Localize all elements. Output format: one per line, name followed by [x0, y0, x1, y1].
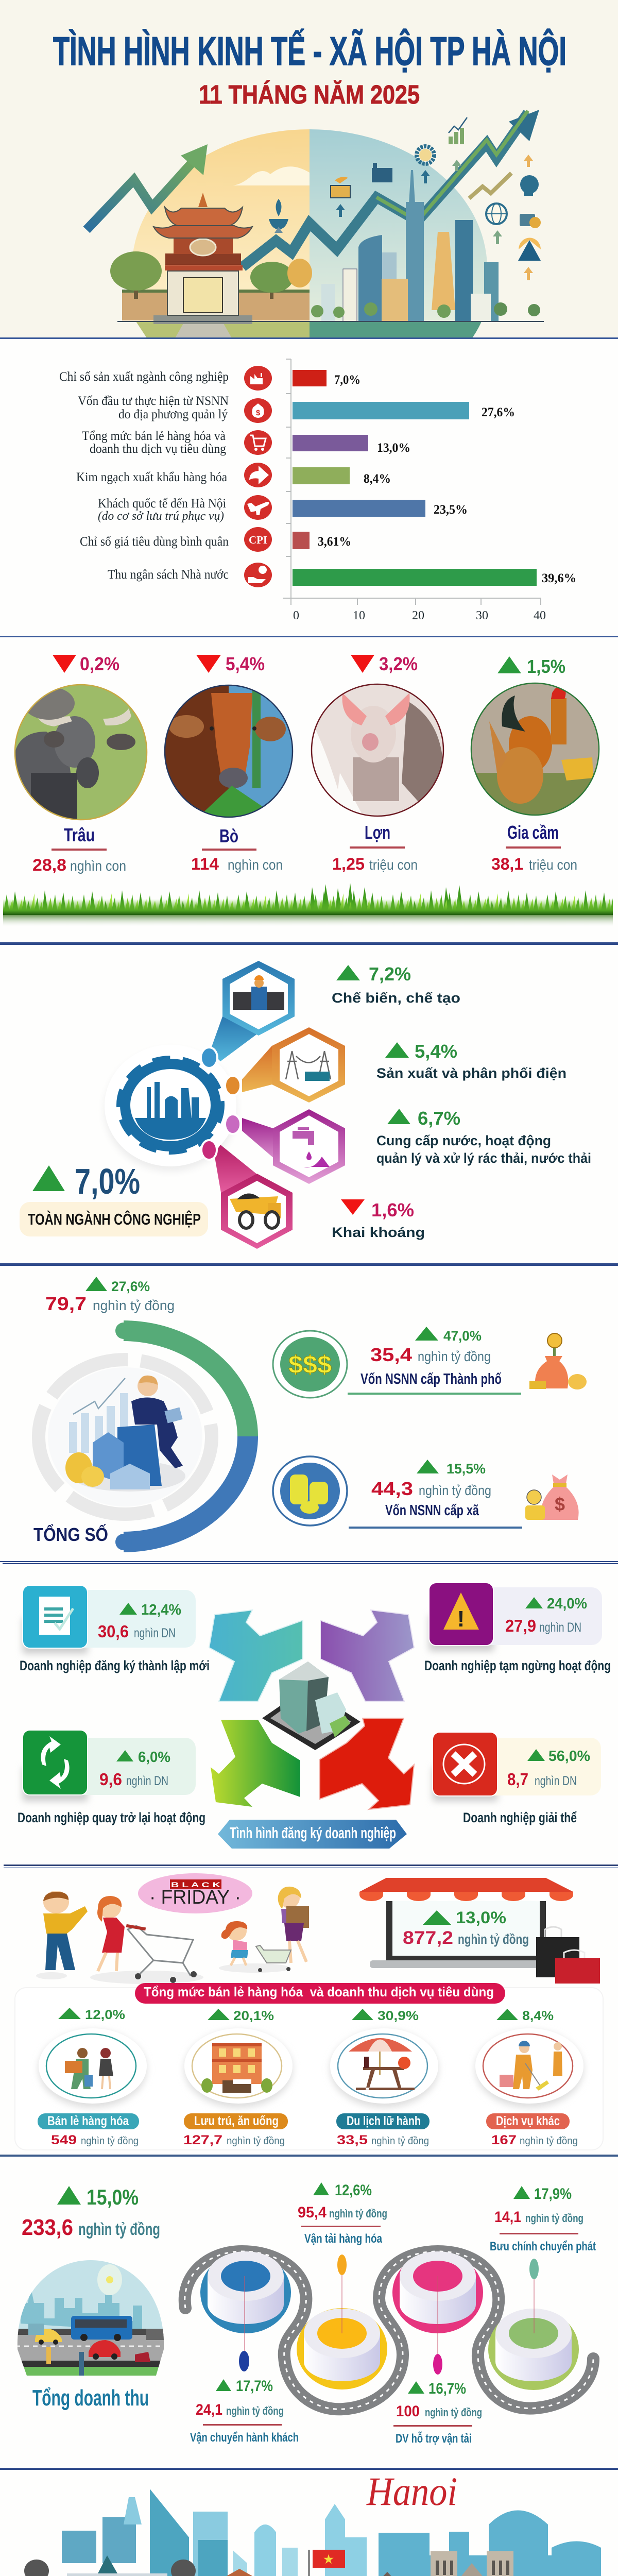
- column: goods retail: [38, 2008, 147, 2147]
- building: Ho Chi Minh Mausoleum and flag: ★: [323, 2553, 334, 2566]
- stat: total retail: 877,2: [403, 1928, 453, 1948]
- stat: poultry change: [497, 656, 565, 677]
- stat: manufacturing: [332, 963, 460, 1006]
- stat: water and waste: Cung cấp nước, hoạt động: [376, 1133, 551, 1148]
- card: new enterprises: 12,4%: [141, 1602, 181, 1618]
- stat: total retail: 13,0%: [456, 1908, 506, 1927]
- column: goods retail: 549: [51, 2133, 77, 2147]
- illustration: online store laptop: [359, 1878, 600, 1984]
- badge: Black Friday: · FRIDAY ·: [149, 1887, 241, 1908]
- row: international visitors: Khách quốc tế đến Hà Nội: [98, 497, 226, 511]
- label: Bò: 114: [191, 855, 219, 873]
- label: Bò: nghìn con: [228, 857, 283, 873]
- row: CPI: CPI: [249, 534, 267, 546]
- row: public investment: [78, 394, 515, 423]
- label: enterprise registration status: [218, 1820, 407, 1849]
- card: suspended enterprises: nghìn DN: [539, 1620, 581, 1635]
- panel: retail breakdown: [15, 1988, 603, 2150]
- stat: postal delivery: nghìn tỷ đồng: [525, 2212, 583, 2225]
- photo: buffalo: [15, 685, 147, 820]
- photo border: buffalo: [15, 685, 147, 820]
- label: Lợn: 1,25: [332, 855, 365, 873]
- building: St Joseph Cathedral: [431, 2551, 513, 2576]
- column: travel: 30,9%: [377, 2009, 419, 2023]
- illustration: shoppers: [36, 1887, 309, 1984]
- icon: pink money bag: $: [555, 1494, 565, 1515]
- illustration: street scene: [15, 2260, 166, 2377]
- stat: support services: [393, 2380, 482, 2446]
- photo: chicken: [471, 683, 599, 815]
- label: total revenue: Tổng doanh thu: [32, 2385, 149, 2411]
- card: resumed enterprises: 6,0%: [138, 1749, 170, 1766]
- photo border: chicken: [471, 683, 599, 815]
- icon: pink money bag: [525, 1475, 579, 1520]
- label: Trâu: [32, 824, 126, 874]
- panel: livestock: [3, 653, 613, 927]
- stat: city capital: Vốn NSNN cấp Thành phố: [360, 1371, 502, 1387]
- column: travel: Du lịch lữ hành: [347, 2114, 421, 2128]
- stat: electricity: Sản xuất và phân phối điện: [376, 1065, 566, 1081]
- row: state budget: [108, 563, 576, 587]
- header panel: [0, 0, 618, 338]
- stat: total capital: nghìn tỷ đồng: [93, 1298, 175, 1313]
- stat: manufacturing: 7,2%: [369, 963, 411, 985]
- stat: total transport revenue: nghìn tỷ đồng: [78, 2219, 160, 2239]
- column: goods retail: Bán lẻ hàng hóa: [47, 2114, 129, 2128]
- stat: total capital: 79,7: [45, 1293, 87, 1314]
- row: public investment: $: [256, 409, 261, 417]
- card: dissolved enterprises: 56,0%: [548, 1748, 590, 1765]
- subtitle: 11 THÁNG NĂM 2025: [199, 80, 420, 109]
- column: goods retail: 12,0%: [85, 2008, 125, 2022]
- stat: passenger transport: 17,7%: [236, 2378, 273, 2395]
- connector and hexagon: manufacturing: [201, 961, 295, 1068]
- photo: pig: [312, 684, 443, 816]
- column: accommodation and food: Lưu trú, ăn uống: [194, 2114, 279, 2128]
- row: international visitors: [98, 495, 468, 523]
- panel: transport: [15, 2182, 596, 2446]
- stat: support services: 16,7%: [428, 2380, 466, 2397]
- row: industrial production: 7,0%: [334, 373, 360, 387]
- icon: orange money bag: [529, 1333, 587, 1389]
- stat: passenger transport: [190, 2378, 299, 2445]
- connector and hexagon: electricity: [225, 1027, 345, 1103]
- icon: commune capital coin: [273, 1456, 347, 1526]
- row: industrial production: [59, 366, 360, 391]
- stat: commune capital: nghìn tỷ đồng: [419, 1483, 491, 1498]
- label: Bò: Bò: [219, 825, 238, 846]
- row: CPI: 3,61%: [318, 535, 351, 549]
- stat: postal delivery: [490, 2185, 596, 2253]
- building: Opera House: [19, 2555, 204, 2576]
- stat: support services: nghìn tỷ đồng: [425, 2406, 482, 2419]
- bar chart axes: [283, 359, 541, 605]
- axis labels: [293, 609, 546, 622]
- row: state budget: Thu ngân sách Nhà nước: [108, 568, 229, 582]
- axis labels: 30: [476, 609, 488, 622]
- stat: buffalo change: 0,2%: [80, 653, 119, 674]
- ring: capital split: [115, 1323, 248, 1550]
- card: new enterprises: [20, 1585, 210, 1673]
- card: suspended enterprises: !: [457, 1606, 465, 1632]
- axis labels: 0: [293, 609, 299, 622]
- row: exports: Kim ngạch xuất khẩu hàng hóa: [76, 470, 227, 484]
- card: suspended enterprises: [424, 1583, 611, 1673]
- label: Lợn: triệu con: [369, 857, 418, 873]
- axis labels: 10: [353, 609, 365, 622]
- column: goods retail: nghìn tỷ đồng: [81, 2136, 139, 2147]
- panel: retail: [15, 1873, 603, 2150]
- stat: mining: Khai khoáng: [332, 1225, 425, 1240]
- stat: commune capital: 44,3: [371, 1478, 413, 1499]
- column: other services: nghìn tỷ đồng: [520, 2136, 578, 2147]
- icon: office building: [262, 1662, 360, 1750]
- cylinder: passenger transport: [200, 2251, 291, 2371]
- temple gate: [153, 193, 252, 338]
- stat: cow change: 5,4%: [226, 653, 265, 674]
- stat: total transport revenue: 233,6: [22, 2215, 73, 2240]
- card: suspended enterprises: 24,0%: [547, 1596, 587, 1612]
- column: accommodation and food: [183, 2009, 293, 2147]
- stat: passenger transport: Vận chuyển hành khách: [190, 2431, 299, 2445]
- card: resumed enterprises: 9,6: [99, 1770, 122, 1789]
- card: resumed enterprises: [18, 1730, 205, 1825]
- stat: freight transport: 95,4: [298, 2204, 327, 2221]
- arrow: main growth: [243, 110, 539, 267]
- card: new enterprises: Doanh nghiệp đăng ký thành lập mới: [20, 1658, 210, 1673]
- stat: whole industry: [20, 1161, 208, 1236]
- stat: city capital: 47,0%: [443, 1328, 482, 1344]
- grass strip: [3, 883, 613, 927]
- stat: poultry change: 1,5%: [527, 656, 565, 677]
- building: One Pillar Pagoda: [350, 2572, 424, 2576]
- stat: pig change: [351, 653, 418, 674]
- connector and hexagon: mining: [201, 1140, 293, 1249]
- row: CPI: [80, 527, 351, 552]
- stat: passenger transport: 24,1: [196, 2401, 222, 2418]
- stat: support services: 100: [396, 2403, 420, 2420]
- row: public investment: do địa phương quản lý: [118, 408, 228, 421]
- axis labels: 40: [534, 609, 546, 622]
- stat: total retail: nghìn tỷ đồng: [458, 1931, 529, 1947]
- row: retail: Tổng mức bán lẻ hàng hóa và: [82, 429, 226, 443]
- label: Trâu: nghìn con: [70, 858, 126, 874]
- stat: city capital: nghìn tỷ đồng: [418, 1349, 491, 1364]
- stat: commune capital: Vốn NSNN cấp xã: [385, 1502, 479, 1519]
- card: new enterprises: 30,6: [98, 1622, 129, 1641]
- stat: mining: 1,6%: [371, 1199, 414, 1221]
- label: Trâu: Trâu: [64, 824, 95, 845]
- stat: mining: [332, 1199, 425, 1240]
- column: travel: 33,5: [337, 2133, 368, 2147]
- stat: pig change: 3,2%: [379, 653, 418, 674]
- label: Gia cầm: Gia cầm: [507, 822, 559, 843]
- label: Gia cầm: triệu con: [529, 857, 577, 873]
- hero illustration: temple and city: [87, 110, 544, 338]
- icons around chart: [269, 117, 541, 280]
- illustration: analyst on charts: [39, 1360, 212, 1514]
- stat: support services: DV hỗ trợ vận tải: [396, 2431, 472, 2446]
- stat: postal delivery: 14,1: [494, 2209, 521, 2226]
- stat: total capital: 27,6%: [111, 1279, 150, 1294]
- stat: freight transport: Vận tải hàng hóa: [304, 2232, 383, 2246]
- axis labels: 20: [412, 609, 424, 622]
- row: international visitors: (do cơ sở lưu trú phục vụ): [98, 510, 224, 523]
- road winding through cylinders: [185, 2251, 593, 2409]
- card: dissolved enterprises: Doanh nghiệp giải thể: [463, 1810, 577, 1825]
- column: other services: [475, 2009, 583, 2147]
- panel: tourism: [11, 2469, 615, 2576]
- stat: freight transport: [298, 2182, 387, 2246]
- row: industrial production: Chỉ số sản xuất ngành công nghiệp: [59, 370, 229, 384]
- connector and hexagon: water: [225, 1109, 345, 1184]
- column: accommodation and food: 127,7: [183, 2133, 222, 2147]
- icon: city capital coin: [273, 1331, 347, 1398]
- illustration: Hanoi skyline: [11, 2489, 615, 2576]
- stat: city capital: [348, 1327, 521, 1395]
- row: CPI: Chỉ số giá tiêu dùng bình quân: [80, 535, 229, 549]
- column: travel: nghìn tỷ đồng: [371, 2136, 429, 2147]
- column: accommodation and food: 20,1%: [233, 2009, 274, 2023]
- stat: whole industry: 7,0%: [75, 1161, 140, 1201]
- card: dissolved enterprises: 8,7: [507, 1770, 528, 1789]
- column: travel: [330, 2009, 438, 2147]
- stat: total capital: [45, 1277, 175, 1314]
- row: exports: [76, 463, 391, 487]
- label: total: TỔNG SỐ: [33, 1523, 108, 1545]
- cylinder: postal delivery: [488, 2259, 579, 2390]
- column: other services: 8,4%: [522, 2009, 554, 2023]
- stat: total transport revenue: [22, 2185, 160, 2240]
- stat: water and waste: [376, 1108, 591, 1166]
- stat: passenger transport: nghìn tỷ đồng: [226, 2404, 284, 2417]
- photo border: cow: [165, 685, 293, 817]
- label: enterprise registration status: Tình hình đăng ký doanh nghiệp: [230, 1824, 396, 1842]
- label: Lợn: [332, 822, 418, 873]
- stat: buffalo change: [53, 653, 119, 674]
- arrow: top right: [320, 1610, 414, 1701]
- row: retail: doanh thu dịch vụ tiêu dùng: [90, 442, 226, 456]
- row: retail: 13,0%: [377, 441, 410, 455]
- cylinder: freight transport: [297, 2255, 387, 2389]
- card: suspended enterprises: 27,9: [505, 1616, 536, 1635]
- card: resumed enterprises: Doanh nghiệp quay trở lại hoạt động: [18, 1810, 205, 1825]
- stat: freight transport: 12,6%: [335, 2182, 372, 2199]
- stat: city capital: 35,4: [370, 1344, 412, 1365]
- badge: Black Friday: [138, 1873, 252, 1913]
- label: Gia cầm: 38,1: [491, 855, 523, 873]
- stat: commune capital: 15,5%: [447, 1461, 486, 1477]
- label: Lợn: Lợn: [365, 822, 390, 843]
- cylinder: transport support services: [392, 2251, 483, 2375]
- stat: whole industry: TOÀN NGÀNH CÔNG NGHIỆP: [28, 1210, 201, 1228]
- photo border: pig: [312, 684, 443, 816]
- stat: water and waste: quản lý và xử lý rác thải, nước thải: [376, 1150, 591, 1166]
- panel: public investment capital: [33, 1277, 587, 1550]
- card: dissolved enterprises: nghìn DN: [535, 1774, 577, 1788]
- stat: cow change: [196, 653, 265, 674]
- arrow: top left: [209, 1610, 303, 1701]
- badge: Black Friday: B L A C K: [171, 1880, 220, 1889]
- panel: industry: [20, 961, 591, 1249]
- row: exports: 8,4%: [364, 472, 391, 486]
- column: other services: 167: [491, 2133, 517, 2147]
- stat: water and waste: 6,7%: [418, 1108, 460, 1129]
- stat: commune capital: [349, 1460, 522, 1529]
- stat: electricity: 5,4%: [415, 1041, 457, 1062]
- photo: cow: [165, 685, 293, 817]
- label: Trâu: 28,8: [32, 856, 66, 874]
- card: new enterprises: nghìn DN: [134, 1626, 176, 1640]
- building: Ho Chi Minh Mausoleum and flag: [276, 2550, 345, 2576]
- column: accommodation and food: nghìn tỷ đồng: [227, 2136, 285, 2147]
- city skyline: [117, 170, 544, 322]
- panel: enterprise registration: [18, 1583, 611, 1849]
- label: Gia cầm: [491, 822, 577, 873]
- row: retail: [82, 429, 410, 456]
- banner: retail total heading: Tổng mức bán lẻ hàng hóa và doanh thu dịch vụ tiêu dùng: [144, 1984, 494, 1999]
- row: state budget: 39,6%: [542, 571, 576, 585]
- stat: total retail: [403, 1908, 529, 1948]
- stat: electricity: [376, 1041, 566, 1081]
- arrow: left growth: [87, 144, 208, 230]
- building: Temple of Literature gate: [209, 2569, 272, 2576]
- row: public investment: 27,6%: [482, 405, 515, 419]
- card: resumed enterprises: nghìn DN: [126, 1774, 168, 1788]
- stat: postal delivery: 17,9%: [534, 2185, 572, 2202]
- card: dissolved enterprises: [433, 1732, 601, 1825]
- column: other services: Dịch vụ khác: [496, 2114, 560, 2128]
- row: international visitors: 23,5%: [434, 503, 468, 517]
- stat: freight transport: nghìn tỷ đồng: [329, 2207, 387, 2220]
- icon: city capital coin: $$$: [288, 1351, 332, 1379]
- row: public investment: Vốn đầu tư thực hiện từ NSNN: [78, 394, 229, 408]
- arrow: bottom left: [211, 1720, 300, 1807]
- trees: [110, 251, 312, 299]
- stat: manufacturing: Chế biến, chế tạo: [332, 990, 460, 1006]
- panel: key indicators bar chart: [59, 359, 576, 622]
- central gear icon: [105, 1045, 236, 1171]
- script heading: Hanoi: Hanoi: [366, 2469, 457, 2514]
- stat: total transport revenue: 15,0%: [87, 2185, 139, 2209]
- label: Bò: [191, 825, 283, 873]
- arrow: bottom right: [320, 1718, 414, 1809]
